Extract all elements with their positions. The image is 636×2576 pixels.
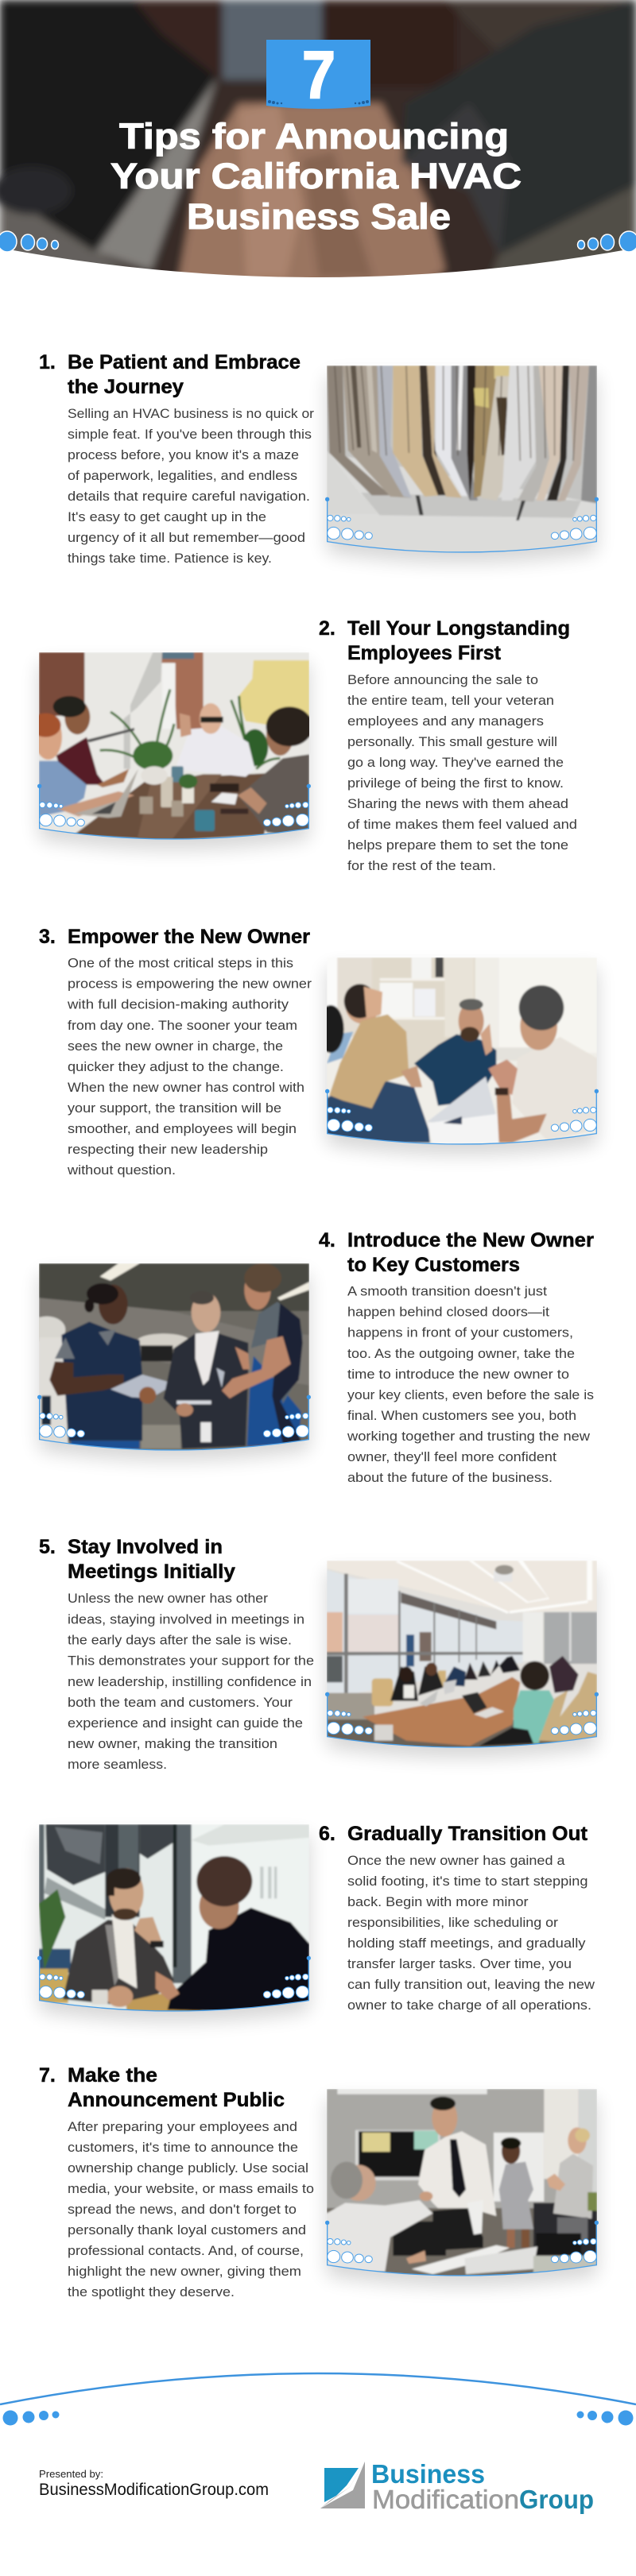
tip 4 text: too. As the outgoing owner, take the bbox=[347, 1346, 575, 1361]
tip 2 heading: 2. bbox=[319, 617, 335, 640]
tip 1 text: process before, you know it's a maze bbox=[68, 447, 299, 462]
tip 5 text: This demonstrates your support for the bbox=[68, 1653, 314, 1669]
tip 6 text: solid footing, it's time to start stepping bbox=[347, 1874, 588, 1889]
tip 1 heading: Be Patient and Embrace bbox=[68, 351, 301, 373]
photo: two businessmen in conversation bbox=[37, 1824, 311, 2023]
tip 5 text: new leadership, instilling confidence in bbox=[68, 1674, 312, 1689]
tip 5 text: more seamless. bbox=[68, 1757, 167, 1772]
tip 4 text: about the future of the business. bbox=[347, 1470, 553, 1485]
title: Tips for Announcing bbox=[119, 116, 509, 157]
tip 2 text: of time makes them feel valued and bbox=[347, 817, 577, 832]
tip 2 text: privilege of being the first to know. bbox=[347, 776, 564, 791]
tip 6 heading: 6. bbox=[319, 1823, 335, 1845]
tip 1 heading: 1. bbox=[39, 351, 56, 373]
tip 3 text: with full decision-making authority bbox=[67, 996, 289, 1012]
tip 4 text: A smooth transition doesn't just bbox=[347, 1284, 547, 1298]
tip 5 text: Unless the new owner has other bbox=[68, 1591, 268, 1606]
header decorative dots right bbox=[577, 231, 636, 252]
tip 7 heading bbox=[39, 2064, 285, 2111]
number badge: 7 bbox=[302, 37, 335, 112]
tip 1 text: simple feat. If you've been through this bbox=[68, 427, 312, 442]
tip 1 heading bbox=[39, 351, 301, 398]
tip 4 text: happens in front of your customers, bbox=[347, 1325, 573, 1340]
footer dots left bbox=[3, 2411, 59, 2425]
tip 6 text: can fully transition out, leaving the new bbox=[347, 1977, 595, 1992]
tip 4 heading: Introduce the New Owner bbox=[347, 1229, 594, 1251]
tip 5 heading: 5. bbox=[39, 1536, 56, 1558]
footer curve bbox=[0, 2373, 636, 2404]
photo: file folders bbox=[325, 366, 599, 564]
tip 1 text: details that require careful navigation. bbox=[68, 489, 310, 504]
tip 7 text: spread the news, and don't forget to bbox=[68, 2202, 297, 2217]
tip 4 text: time to introduce the new owner to bbox=[347, 1367, 569, 1382]
photo: conference room bbox=[325, 1561, 599, 1759]
tip 5 heading bbox=[39, 1536, 235, 1583]
tip 1 text bbox=[68, 406, 314, 566]
tip 1 text: It's easy to get caught up in the bbox=[68, 509, 266, 524]
title bbox=[111, 116, 522, 237]
presented by: Presented by: bbox=[39, 2468, 103, 2480]
tip 4 text: final. When customers see you, both bbox=[347, 1408, 576, 1423]
tip 7 text: highlight the new owner, giving them bbox=[68, 2264, 301, 2279]
tip 4 heading: to Key Customers bbox=[347, 1254, 520, 1276]
tip 2 text: helps prepare them to set the tone bbox=[347, 837, 568, 853]
tip 3 text: sees the new owner in charge, the bbox=[68, 1039, 283, 1054]
tip 3 text: When the new owner has control with bbox=[68, 1080, 304, 1095]
logo: Business Modification Group: Business bbox=[371, 2459, 485, 2489]
tip 2 text: for the rest of the team. bbox=[347, 858, 496, 873]
title: Business Sale bbox=[187, 196, 451, 237]
tip 2 text: employees and any managers bbox=[347, 714, 544, 729]
tip 1 text: Selling an HVAC business is no quick or bbox=[68, 406, 314, 421]
tip 7 text: customers, it's time to announce the bbox=[68, 2140, 298, 2155]
tip 2 text: the entire team, tell your veteran bbox=[347, 693, 554, 708]
presented by bbox=[39, 2468, 269, 2499]
tip 3 text: your support, the transition will be bbox=[68, 1100, 281, 1116]
photo: team meeting at wooden table bbox=[30, 652, 312, 851]
tip 7 text bbox=[68, 2119, 314, 2299]
tip 1 text: of paperwork, legalities, and endless bbox=[68, 468, 297, 483]
tip 6 text: responsibilities, like scheduling or bbox=[347, 1915, 558, 1930]
tip 6 text: owner to take charge of all operations. bbox=[347, 1998, 591, 2013]
tip 1 heading: the Journey bbox=[68, 376, 184, 398]
tip 4 heading: 4. bbox=[319, 1229, 335, 1251]
tip 6 text: Once the new owner has gained a bbox=[347, 1853, 565, 1868]
presented by: BusinessModificationGroup.com bbox=[39, 2481, 269, 2499]
tip 7 text: personally thank loyal customers and bbox=[68, 2222, 306, 2238]
logo: Business Modification Group: Group bbox=[519, 2485, 594, 2514]
tip 2 text: Before announcing the sale to bbox=[347, 672, 538, 687]
tip 2 heading: Tell Your Longstanding bbox=[347, 617, 570, 640]
photo: three men talking in a workshop bbox=[29, 1263, 311, 1462]
tip 4 heading bbox=[319, 1229, 594, 1276]
tip 5 text: new owner, making the transition bbox=[68, 1736, 277, 1751]
tip 5 text bbox=[68, 1591, 314, 1772]
tip 3 text: without question. bbox=[67, 1162, 176, 1178]
tip 4 text: working together and trusting the new bbox=[347, 1429, 591, 1444]
tip 4 text: happen behind closed doors—it bbox=[347, 1305, 549, 1319]
tip 3 heading: Empower the New Owner bbox=[68, 926, 310, 948]
tip 4 text: your key clients, even before the sale is bbox=[347, 1387, 594, 1402]
tip 2 text: Sharing the news with them ahead bbox=[347, 796, 568, 811]
tip 5 heading: Stay Involved in bbox=[68, 1536, 223, 1558]
tip 3 heading: 3. bbox=[39, 926, 56, 948]
tip 7 text: professional contacts. And, of course, bbox=[68, 2243, 304, 2258]
logo: Business Modification Group bbox=[320, 2459, 594, 2514]
tip 3 text: smoother, and employees will begin bbox=[68, 1121, 297, 1136]
tip 7 text: the spotlight they deserve. bbox=[68, 2284, 235, 2299]
tip 7 text: After preparing your employees and bbox=[68, 2119, 297, 2134]
tip 3 text bbox=[67, 955, 312, 1178]
logo: Business Modification Group: Modification bbox=[372, 2485, 519, 2514]
tip 4 text: owner, they'll feel more confident bbox=[347, 1449, 556, 1464]
tip 6 text bbox=[347, 1853, 595, 2013]
tip 6 text: holding staff meetings, and gradually bbox=[347, 1936, 586, 1951]
header decorative dots left bbox=[0, 231, 59, 252]
tip 5 text: ideas, staying involved in meetings in bbox=[68, 1611, 304, 1627]
tip 3 text: from day one. The sooner your team bbox=[68, 1018, 297, 1033]
tip 6 text: transfer larger tasks. Over time, you bbox=[347, 1956, 572, 1971]
title: Your California HVAC bbox=[111, 156, 522, 196]
tip 5 text: the early days after the sale is wise. bbox=[68, 1632, 292, 1648]
tip 6 text: back. Begin with more minor bbox=[347, 1894, 529, 1909]
tip 2 text: personally. This small gesture will bbox=[347, 734, 557, 749]
tip 2 text bbox=[347, 672, 577, 873]
tip 2 heading: Employees First bbox=[347, 642, 502, 664]
tip 5 heading: Meetings Initially bbox=[68, 1561, 235, 1583]
tip 1 text: things take time. Patience is key. bbox=[68, 551, 272, 566]
tip 2 heading bbox=[319, 617, 570, 664]
tip 5 text: experience and insight can guide the bbox=[68, 1715, 303, 1731]
tip 3 text: quicker they adjust to the change. bbox=[68, 1059, 284, 1074]
number badge bbox=[266, 37, 370, 112]
tip 7 heading: Announcement Public bbox=[68, 2089, 285, 2111]
tip 1 text: urgency of it all but remember—good bbox=[68, 530, 305, 545]
photo: handshake announcement in office bbox=[325, 2089, 599, 2288]
tip 3 text: One of the most critical steps in this bbox=[68, 955, 293, 971]
tip 5 text: both the team and customers. Your bbox=[68, 1695, 293, 1710]
tip 2 text: go a long way. They've earned the bbox=[347, 755, 564, 770]
tip 4 text bbox=[347, 1284, 594, 1485]
footer dots right bbox=[577, 2411, 633, 2425]
tip 6 heading: Gradually Transition Out bbox=[347, 1823, 588, 1845]
tip 7 text: ownership change publicly. Use social bbox=[68, 2160, 308, 2176]
tip 3 text: process is empowering the new owner bbox=[68, 976, 312, 992]
photo: discussion around a laptop bbox=[317, 957, 599, 1156]
tip 3 text: respecting their new leadership bbox=[68, 1142, 268, 1157]
panel: header banner photo of handshake bbox=[0, 0, 636, 277]
tip 7 text: media, your website, or mass emails to bbox=[68, 2181, 314, 2196]
tip 7 heading: 7. bbox=[39, 2064, 56, 2087]
tip 7 heading: Make the bbox=[68, 2064, 157, 2087]
